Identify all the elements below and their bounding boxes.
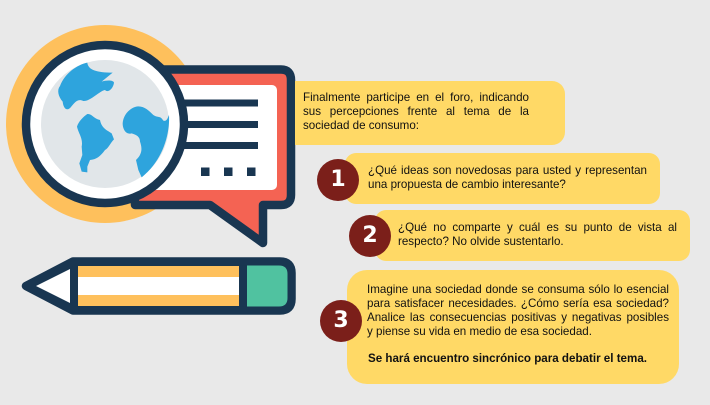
pencil tip [36, 269, 70, 303]
synchronous session note: Se hará encuentro sincrónico para debatir el tema. [368, 352, 647, 365]
question 2 text [398, 221, 677, 248]
question 1 text: una propuesta de cambio interesante? [368, 178, 566, 191]
question 3 text: Analice las consecuencias positivas y negativas posibles [367, 311, 669, 324]
number badge 3 [320, 300, 362, 342]
question 1 text: ¿Qué ideas son novedosas para usted y representan [368, 164, 647, 177]
number badge 2: 2 [362, 223, 378, 248]
intro text: sus percepciones frente al tema de la [303, 105, 529, 118]
question 1 text [368, 164, 647, 191]
number badge 2 [349, 215, 391, 257]
number badge 3: 3 [333, 308, 349, 333]
question 3 callout [347, 270, 679, 384]
pencil eraser [247, 266, 288, 306]
question 2 text: ¿Qué no comparte y cuál es su punto de vista al [398, 221, 677, 234]
icon: globe with speech bubble [6, 25, 296, 248]
question 3 text: para satisfacer necesidades. ¿Cómo sería esa sociedad? [367, 297, 669, 310]
intro text: Finalmente participe en el foro, indicando [303, 91, 529, 104]
intro callout [295, 81, 565, 145]
continents [58, 63, 169, 177]
question 2 callout [375, 210, 690, 261]
orange backdrop circle [6, 25, 204, 223]
question 3 text: y piense su vida en medio de esa sociedad. [367, 325, 592, 338]
number badge 1 [317, 159, 359, 201]
number badge 1: 1 [330, 167, 346, 192]
speech bubble [130, 70, 291, 243]
bubble message panel [150, 85, 277, 190]
pencil body stripes [78, 266, 239, 306]
globe [26, 45, 184, 203]
question 2 text: respecto? No olvide sustentarlo. [398, 235, 564, 248]
question 3 text: Imagine una sociedad donde se consuma sólo lo esencial [367, 283, 669, 296]
question 3 text [367, 283, 669, 338]
question 1 callout [345, 153, 660, 204]
icon: pencil [22, 257, 296, 315]
intro text [303, 91, 529, 132]
intro text: sociedad de consumo: [303, 119, 419, 132]
